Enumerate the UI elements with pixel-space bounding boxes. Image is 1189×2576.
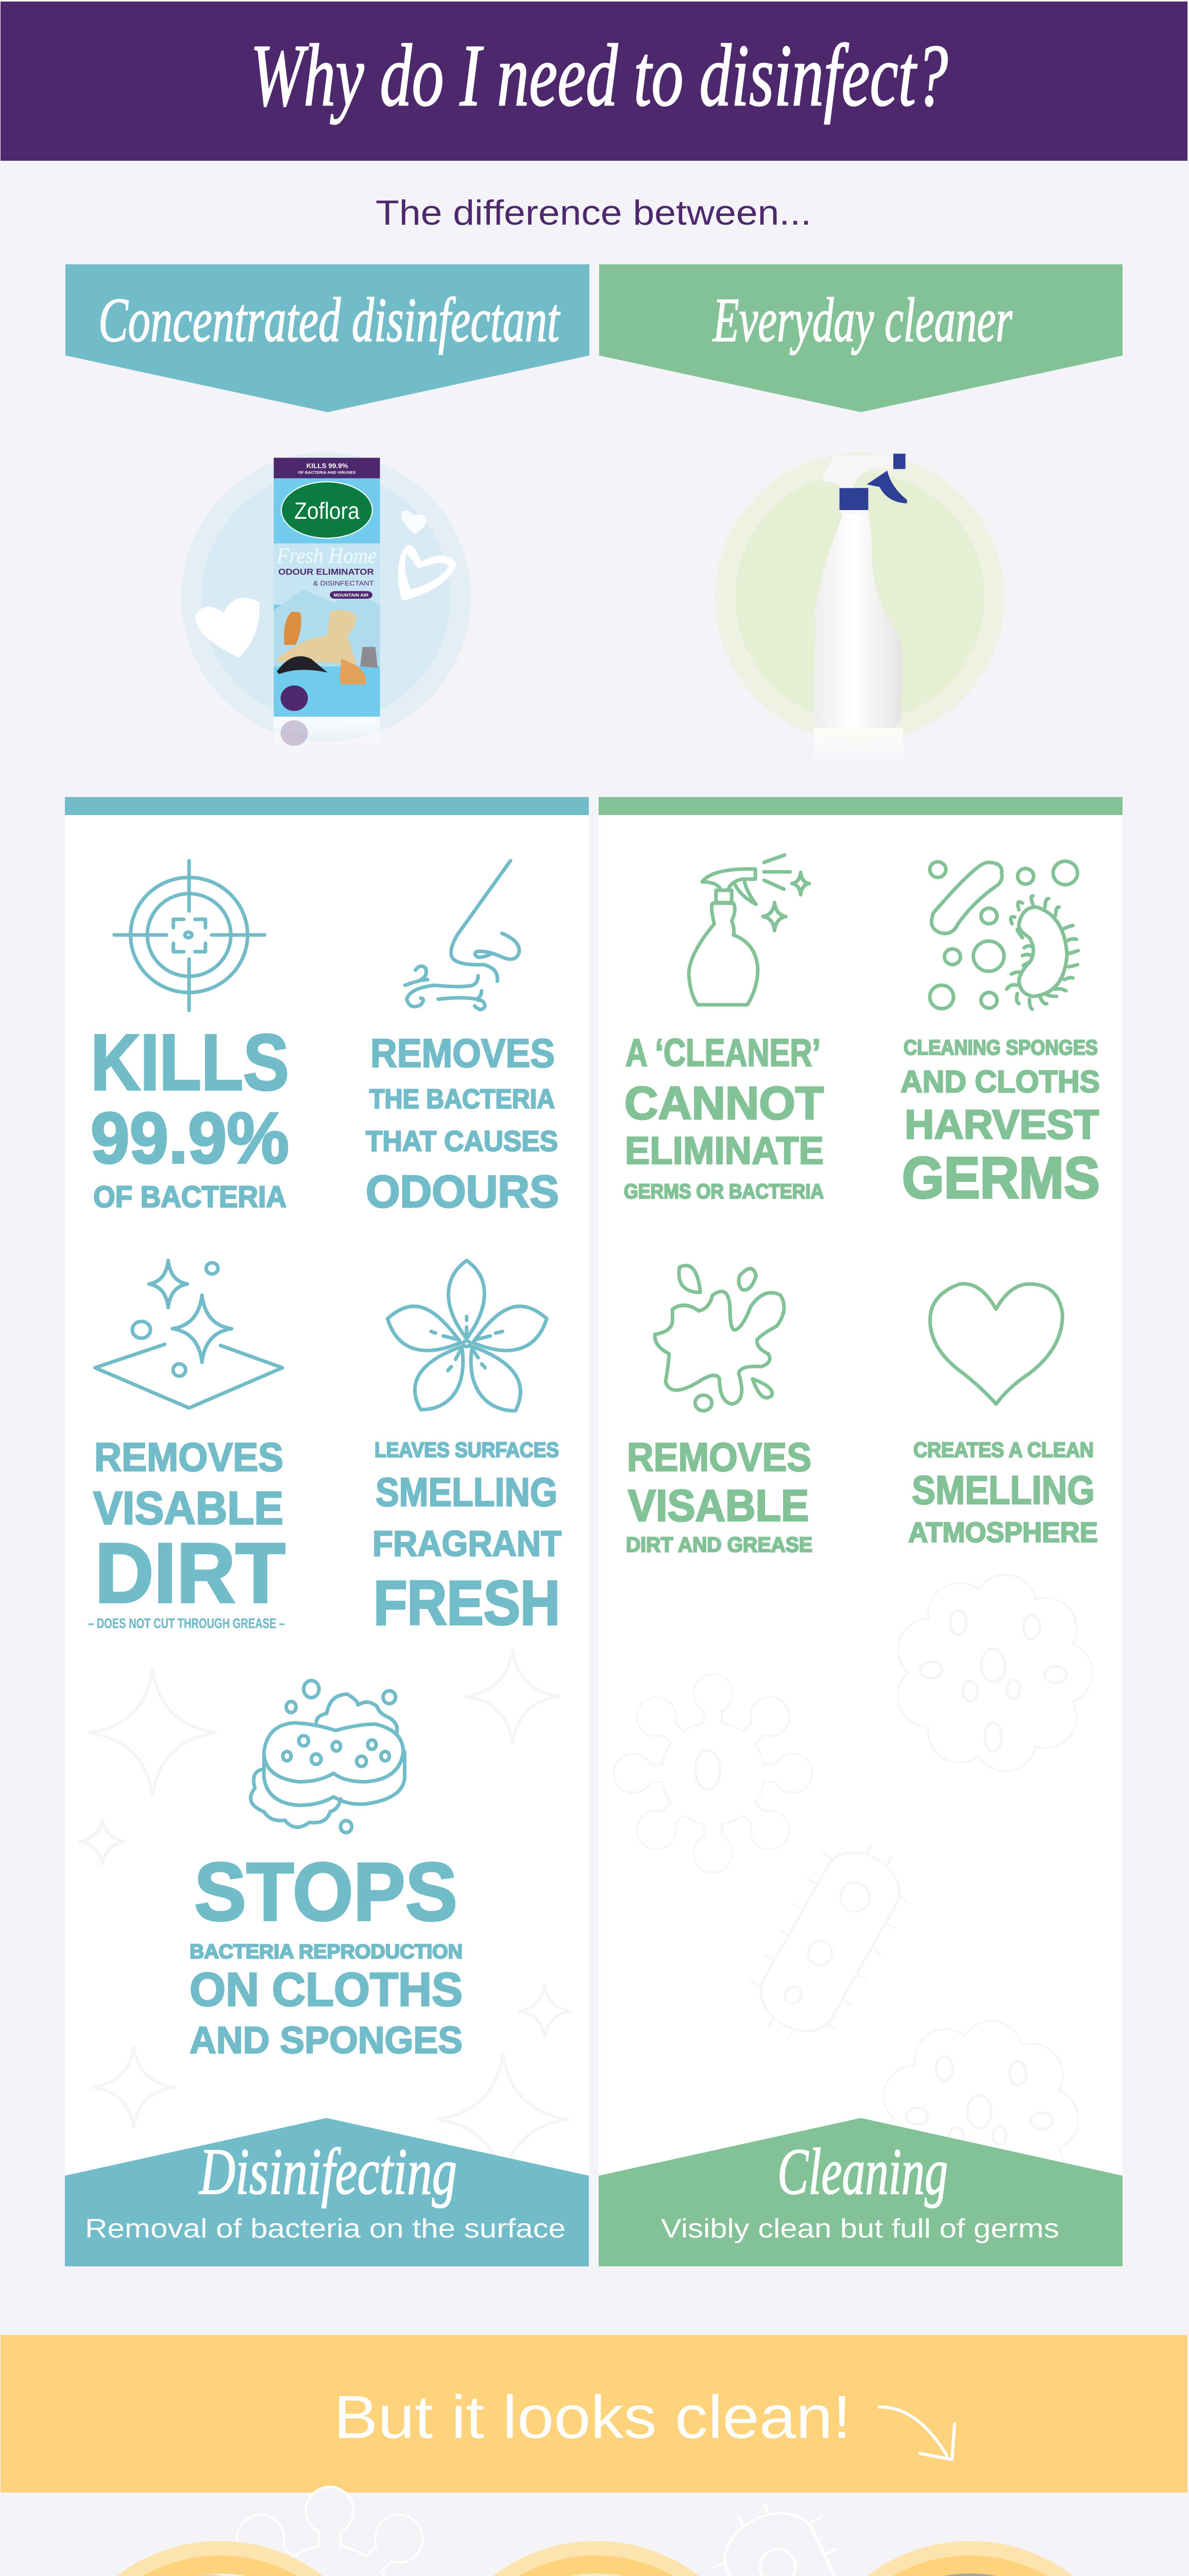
product: Zoflora disinfectant box: KILLS 99.9%	[307, 462, 348, 470]
header arrow: everyday cleaner: Everyday cleaner	[712, 285, 1012, 355]
smelling fresh text block: FRESH	[373, 1568, 560, 1638]
removes dirt text block	[88, 1434, 285, 1631]
sponges harvest germs text block: AND CLOTHS	[901, 1064, 1100, 1099]
makes 20 litres badge	[281, 685, 308, 746]
pets on the box	[275, 610, 378, 684]
icon: splat	[655, 1265, 784, 1411]
removes visible dirt text block: DIRT AND GREASE	[626, 1533, 812, 1556]
icon: sparkling surface	[95, 1261, 282, 1408]
icon: nose	[405, 861, 519, 1009]
clean atmosphere text block: ATMOSPHERE	[908, 1516, 1098, 1548]
stops bacteria text block	[190, 1845, 463, 2061]
removes odours text block: THE BACTERIA	[369, 1084, 555, 1114]
arrow	[879, 2407, 955, 2460]
subtitle: The difference between...	[376, 193, 811, 232]
title banner	[1, 2, 1187, 161]
background sparkles	[79, 1649, 571, 2185]
footer tab: cleaning: Visibly clean but full of germs	[661, 2214, 1059, 2244]
background germs	[623, 1584, 1083, 2208]
title: Why do I need to disinfect?	[250, 27, 948, 125]
banner: but it looks clean: But it looks clean!	[334, 2383, 851, 2451]
header arrow: concentrated disinfectant: Concentrated disinfectant	[98, 285, 560, 355]
sponges harvest germs text block: GERMS	[902, 1145, 1100, 1210]
box front	[274, 458, 380, 717]
footer tab: cleaning: Cleaning	[777, 2135, 948, 2208]
removes dirt text block: DIRT	[95, 1526, 285, 1620]
removes dirt text block: – DOES NOT CUT THROUGH GREASE –	[88, 1616, 285, 1631]
stops bacteria text block: BACTERIA REPRODUCTION	[190, 1941, 463, 1963]
footer tab: disinfecting: Removal of bacteria on the surface	[85, 2214, 566, 2244]
cleaner cannot eliminate text block: CANNOT	[624, 1078, 824, 1129]
sponges harvest germs text block: HARVEST	[905, 1101, 1099, 1147]
icon: heart	[930, 1284, 1062, 1404]
clean atmosphere text block: CREATES A CLEAN	[913, 1438, 1094, 1462]
cleaner cannot eliminate text block: ELIMINATE	[625, 1129, 824, 1172]
sponges harvest germs text block: CLEANING SPONGES	[904, 1036, 1098, 1059]
removes odours text block: REMOVES	[370, 1030, 555, 1076]
panel: disinfectant benefits	[65, 797, 589, 2266]
removes odours text block: THAT CAUSES	[366, 1125, 558, 1157]
removes visible dirt text block: REMOVES	[627, 1434, 811, 1480]
photo circle: high chair	[116, 2541, 324, 2576]
stops bacteria text block: ON CLOTHS	[190, 1963, 463, 2016]
footer tab: disinfecting	[65, 2118, 589, 2266]
removes visible dirt text block: VISABLE	[628, 1481, 809, 1531]
removes dirt text block: REMOVES	[94, 1434, 283, 1480]
product: Zoflora disinfectant box	[181, 452, 471, 753]
removes odours text block: ODOURS	[366, 1166, 559, 1217]
kills text block: OF BACTERIA	[93, 1180, 286, 1214]
product: spray bottle	[715, 452, 1005, 767]
removes dirt text block: VISABLE	[93, 1483, 283, 1534]
sponges harvest germs text block	[901, 1036, 1100, 1210]
cleaner cannot eliminate text block: A ‘CLEANER’	[625, 1031, 821, 1074]
product: Zoflora disinfectant box: & DISINFECTANT	[313, 580, 374, 587]
photo circle: telephone	[867, 2541, 1074, 2576]
removes odours text block	[366, 1030, 559, 1217]
icon: sponge	[250, 1681, 404, 1833]
icon: flower	[387, 1261, 547, 1411]
background germs	[37, 2484, 1166, 2576]
product: Zoflora disinfectant box: MOUNTAIN AIR	[334, 594, 369, 598]
footer tab: cleaning	[599, 2118, 1123, 2266]
box reflection	[274, 717, 380, 753]
header arrow: concentrated disinfectant	[65, 264, 589, 412]
banner: but it looks clean	[1, 2335, 1187, 2493]
stops bacteria text block: STOPS	[194, 1845, 457, 1938]
stops bacteria text block: AND SPONGES	[190, 2020, 463, 2061]
product: Zoflora disinfectant box: OF BACTERIA AND VIRUSES	[298, 470, 355, 474]
removes visible dirt text block	[626, 1434, 812, 1556]
icon: target	[114, 861, 265, 1010]
kills text block	[91, 1018, 289, 1214]
clean atmosphere text block: SMELLING	[912, 1467, 1095, 1513]
kills text block: 99.9%	[91, 1097, 289, 1178]
photo circle: office desk	[492, 2541, 700, 2576]
smelling fresh text block: SMELLING	[376, 1469, 557, 1515]
smelling fresh text block	[372, 1438, 562, 1638]
product: Zoflora disinfectant box: Zoflora	[294, 498, 360, 524]
clean atmosphere text block	[908, 1438, 1098, 1548]
product: Zoflora disinfectant box: ODOUR ELIMINATOR	[278, 567, 374, 577]
panel: everyday cleaner limits	[599, 797, 1123, 2266]
icon: germs	[930, 861, 1078, 1009]
header arrow: everyday cleaner	[599, 264, 1123, 412]
icon: spray bottle	[689, 855, 809, 1005]
cleaner cannot eliminate text block: GERMS OR BACTERIA	[624, 1180, 824, 1203]
kills text block: KILLS	[91, 1018, 289, 1107]
smelling fresh text block: LEAVES SURFACES	[375, 1438, 559, 1462]
product: Zoflora disinfectant box: Fresh Home	[277, 544, 377, 568]
footer tab: disinfecting: Disinifecting	[198, 2135, 457, 2208]
cleaner cannot eliminate text block	[624, 1031, 824, 1203]
smelling fresh text block: FRAGRANT	[372, 1523, 562, 1564]
icon: hearts	[196, 511, 456, 658]
